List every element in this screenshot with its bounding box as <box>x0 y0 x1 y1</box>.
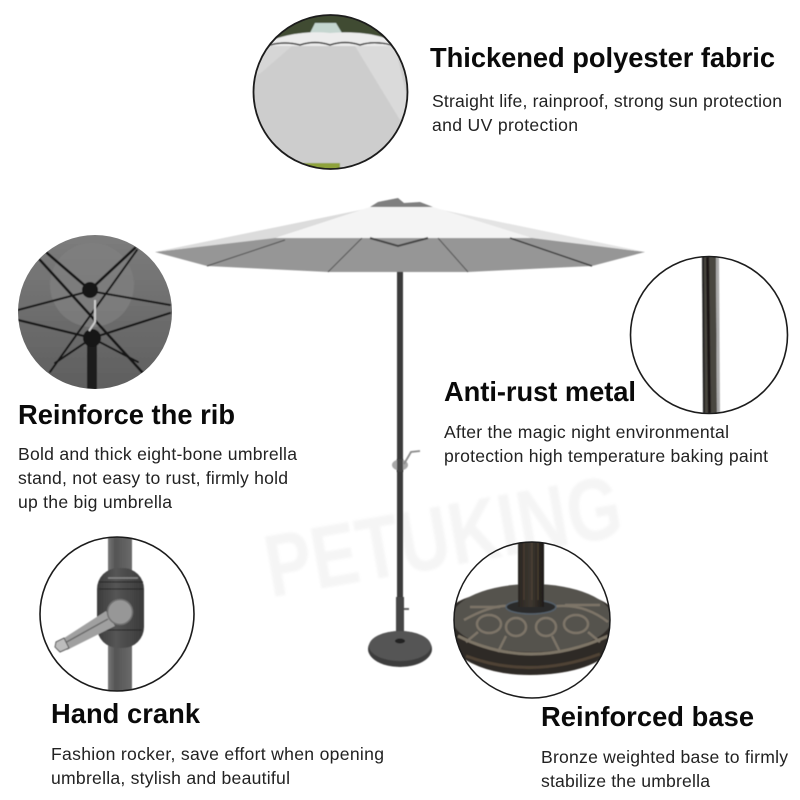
text: rib description: stand, not easy to rust, firmly hold <box>18 468 288 488</box>
text: crank description: Fashion rocker, save effort when opening <box>51 744 384 764</box>
text: rib description: up the big umbrella <box>18 492 172 512</box>
round base <box>368 631 432 667</box>
text: metal description <box>444 422 768 466</box>
text: base description: stabilize the umbrella <box>541 771 710 791</box>
text: fabric description: Straight life, rainproof, strong sun protection <box>432 91 782 111</box>
canopy <box>155 198 645 272</box>
text: rib description: Bold and thick eight-bone umbrella <box>18 444 297 464</box>
umbrella product photo <box>155 198 645 667</box>
text: fabric description: and UV protection <box>432 115 578 135</box>
heading: Thickened polyester fabric: Thickened polyester fabric <box>430 42 775 73</box>
text: fabric description <box>432 91 782 135</box>
text: metal description: protection high temperature baking paint <box>444 446 768 466</box>
text: crank description <box>51 744 384 788</box>
detail circle: reinforced base <box>452 535 612 698</box>
small crank on pole <box>392 451 420 472</box>
text: rib description <box>18 444 297 512</box>
heading: Anti-rust metal: Anti-rust metal <box>444 376 636 407</box>
detail circle: fabric <box>250 10 410 175</box>
detail circle: ribs <box>15 232 175 395</box>
text: metal description: After the magic night environmental <box>444 422 729 442</box>
heading: Reinforced base: Reinforced base <box>541 701 754 732</box>
pole <box>396 237 409 641</box>
heading: Reinforce the rib: Reinforce the rib <box>18 399 235 430</box>
detail circle: hand crank <box>40 535 194 695</box>
text: base description: Bronze weighted base to firmly <box>541 747 788 767</box>
detail circle: pole metal <box>630 255 788 415</box>
heading: Hand crank: Hand crank <box>51 698 201 729</box>
text: crank description: umbrella, stylish and beautiful <box>51 768 290 788</box>
watermark: PETUKING: PETUKING <box>257 456 629 616</box>
text: base description <box>541 747 788 791</box>
